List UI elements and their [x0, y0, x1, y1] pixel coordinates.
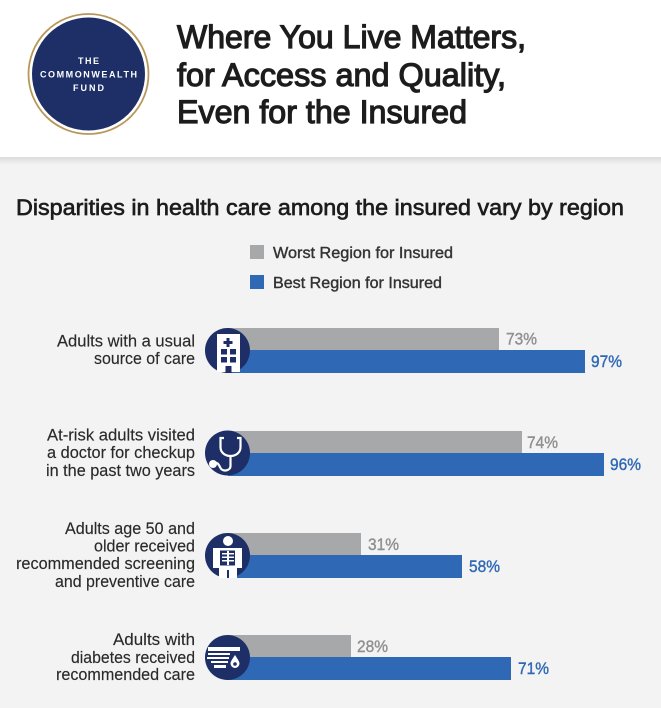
row 2 label: in the past two years	[46, 461, 195, 480]
row 3 bars: 58%	[469, 557, 500, 576]
row 4 label: Adults with	[113, 630, 195, 649]
row 1 bars	[228, 328, 622, 373]
row 1 label: source of care	[94, 349, 195, 368]
row 2 bars: 96%	[610, 455, 641, 474]
logo: The Commonwealth Fund: THE	[78, 56, 99, 66]
legend: Worst Region for Insured	[273, 245, 453, 262]
row 3: screening	[16, 519, 500, 591]
header band	[0, 0, 661, 165]
row 4 bars: 71%	[518, 659, 549, 678]
row 3 label: and preventive care	[55, 572, 195, 591]
row 2: checkup	[46, 426, 641, 480]
title: for Access and Quality,	[177, 57, 506, 93]
row 3 label	[16, 519, 195, 591]
title: Where You Live Matters,	[177, 19, 526, 55]
row 3 bars: 31%	[368, 535, 399, 554]
row 4 label	[56, 630, 195, 684]
row 3 label: Adults age 50 and	[65, 519, 195, 538]
row 1 bars: 97%	[591, 352, 622, 371]
icon: finger and blood drop	[205, 635, 250, 680]
row 1 label: Adults with a usual	[57, 332, 195, 350]
row 2 bars	[228, 431, 641, 476]
row 4 label: recommended care	[56, 665, 195, 684]
row 3 label: recommended screening	[16, 554, 195, 573]
row 4 label: diabetes received	[71, 648, 195, 667]
row 3 bars	[228, 533, 500, 578]
row 4: diabetes	[56, 630, 549, 684]
legend: Best Region for Insured	[273, 275, 442, 292]
logo: The Commonwealth Fund: FUND	[73, 83, 104, 93]
row 1 bars: 73%	[506, 330, 537, 348]
logo: The Commonwealth Fund	[28, 14, 148, 134]
title: Even for the Insured	[177, 94, 467, 130]
row 2 label	[46, 426, 195, 480]
icon: stethoscope	[205, 430, 250, 476]
row 2 label: At-risk adults visited	[47, 426, 195, 444]
row 1 label	[57, 332, 195, 368]
row 2 bars: 74%	[527, 433, 558, 452]
row 2 label: a doctor for checkup	[47, 443, 195, 462]
title	[177, 19, 526, 130]
row 3 label: older received	[94, 536, 195, 556]
row 4 bars	[228, 635, 549, 680]
icon: hospital	[205, 328, 250, 373]
subtitle: Disparities in health care among the insured vary by region	[16, 195, 624, 220]
legend	[250, 245, 453, 292]
icon: x-ray	[205, 533, 250, 578]
row 4 bars: 28%	[357, 637, 388, 656]
logo: The Commonwealth Fund: COMMONWEALTH	[40, 70, 137, 80]
row 1: usual source of care	[57, 328, 622, 373]
